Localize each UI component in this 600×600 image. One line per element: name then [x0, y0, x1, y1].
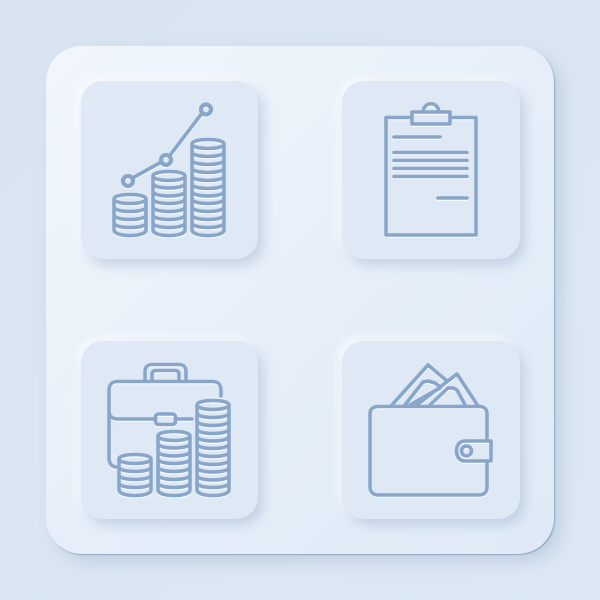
wallet body	[370, 406, 487, 495]
wallet clasp	[456, 441, 491, 461]
clipboard sheet	[386, 118, 476, 235]
clip	[412, 104, 450, 124]
medium coin stack	[158, 432, 190, 496]
short coin stack	[119, 454, 151, 496]
tall coin stack	[192, 140, 224, 236]
briefcase outline	[109, 364, 221, 467]
icon: coin stacks with growth line	[114, 104, 224, 236]
panel: briefcase card	[81, 341, 258, 519]
panel: main board	[46, 46, 554, 554]
document text lines	[394, 137, 467, 198]
clasp button	[462, 446, 472, 456]
panel: clipboard card	[342, 81, 520, 259]
banknotes	[392, 365, 478, 406]
panel: wallet card	[342, 341, 520, 519]
icon: briefcase with coin stacks	[109, 364, 229, 496]
medium coin stack	[153, 172, 185, 236]
icon: wallet with banknotes	[370, 365, 491, 495]
icon: clipboard document	[386, 104, 476, 235]
panel: coin chart card	[81, 81, 258, 259]
short coin stack	[114, 194, 146, 236]
line chart with three nodes	[123, 104, 211, 186]
tall coin stack	[197, 400, 229, 496]
briefcase clasp	[156, 414, 176, 424]
